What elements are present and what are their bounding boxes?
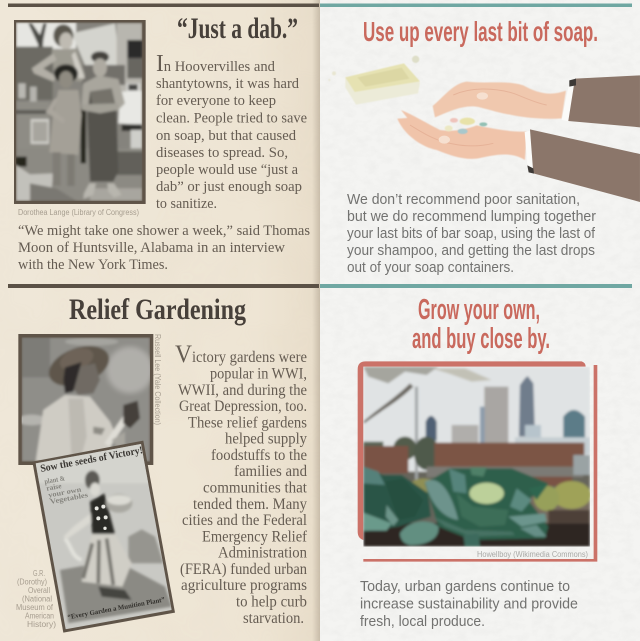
heading: grow your own: Grow your own, bbox=[418, 294, 540, 326]
caption: g.r. overall: Museum of bbox=[16, 603, 54, 612]
body text: urban gardens: Today, urban gardens continue to bbox=[360, 578, 570, 595]
body text: victory gardens: families and bbox=[234, 463, 307, 480]
caption: g.r. overall: Overall bbox=[28, 586, 50, 595]
main cabbage bbox=[425, 468, 548, 540]
body text: victory gardens: tended them. Many bbox=[193, 496, 307, 513]
poster: sow the seeds of victory: raise bbox=[46, 481, 63, 493]
poster: sow the seeds of victory: your own bbox=[47, 485, 82, 499]
boy bbox=[91, 51, 109, 63]
body text: urban gardens bbox=[360, 578, 578, 630]
quote: thomas moon: “We might take one shower a week,” said Thomas bbox=[18, 223, 310, 239]
body text: victory gardens: Administration bbox=[218, 545, 307, 562]
icon: lower hand bbox=[397, 110, 527, 160]
heading: just a dab: “Just a dab.” bbox=[177, 12, 298, 45]
heading: relief gardening: Relief Gardening bbox=[69, 293, 246, 326]
body text: hoovervilles: on soap, but that caused bbox=[156, 128, 296, 144]
body text: victory gardens: cities and the Federal bbox=[182, 512, 307, 529]
girl bbox=[54, 64, 78, 83]
body text: soap advice: your shampoo, and getting the last drops bbox=[347, 242, 595, 259]
body text: victory gardens: helped supply bbox=[225, 431, 307, 448]
body text: victory gardens bbox=[175, 341, 308, 627]
body text: hoovervilles: people would use “just a bbox=[156, 162, 298, 178]
caption: russell lee: Russell Lee (Yale Collection) bbox=[153, 334, 162, 425]
body text: victory gardens: popular in WWI, bbox=[210, 366, 307, 382]
body text: soap advice: your last bits of bar soap, using the last of bbox=[347, 225, 596, 242]
body text: hoovervilles: diseases to spread. So, bbox=[156, 145, 288, 161]
photo: gardener with hat bbox=[17, 334, 153, 465]
panel: relief gardening bbox=[8, 284, 319, 633]
panel: grow your own bbox=[320, 284, 632, 630]
caption: howellboy: Howellboy (Wikimedia Commons) bbox=[477, 550, 588, 559]
body text: victory gardens: WWII, and during the bbox=[178, 382, 307, 399]
icon: lower sleeve bbox=[525, 129, 640, 202]
icon: soap bar bbox=[328, 56, 420, 105]
poster: sow the seeds of victory: plant & bbox=[44, 473, 66, 486]
body text: victory gardens: (FERA) funded urban bbox=[180, 561, 307, 578]
photo credit: Dorothea Lange (Library of Congress) bbox=[18, 208, 139, 217]
panel: use up soap bbox=[320, 4, 640, 276]
frame bbox=[358, 361, 586, 540]
woman behind bbox=[53, 24, 73, 47]
body text: hoovervilles: clean. People tried to save bbox=[156, 110, 307, 126]
body text: soap advice: but we do recommend lumping together bbox=[347, 208, 596, 225]
body text: soap advice: out of your soap containers. bbox=[347, 259, 514, 276]
icon: soap scraps bbox=[445, 118, 487, 134]
icon: finger creases bbox=[410, 89, 547, 146]
body text: hoovervilles: to sanitize. bbox=[156, 196, 217, 212]
caption: g.r. overall: American bbox=[25, 612, 54, 620]
poster: sow the seeds of victory: “Every Garden a Munition Plant” bbox=[67, 596, 166, 621]
poster: sow the seeds of victory: Vegetables bbox=[49, 490, 89, 506]
body text: urban gardens: increase sustainability and provide bbox=[360, 596, 578, 612]
body text: victory gardens: Emergency Relief bbox=[202, 528, 308, 545]
quote: thomas moon: Moon of Huntsville, Alabama in an interview bbox=[18, 240, 285, 256]
body text: soap advice bbox=[347, 191, 596, 276]
panel: just a dab bbox=[8, 4, 319, 273]
caption: g.r. overall: History) bbox=[27, 620, 56, 629]
body text: victory gardens: Victory gardens were bbox=[175, 341, 307, 368]
caption: g.r. overall: (National bbox=[22, 594, 52, 604]
icon: nails bbox=[439, 92, 488, 144]
body text: hoovervilles: In Hoovervilles and bbox=[156, 51, 275, 77]
photo frame and cabbage photo bbox=[358, 361, 597, 562]
body text: hoovervilles bbox=[156, 51, 307, 212]
poster: sow the seeds of victory bbox=[32, 440, 178, 633]
body text: victory gardens: agriculture programs bbox=[181, 577, 307, 594]
caption: g.r. overall bbox=[16, 569, 56, 629]
caption: g.r. overall: G.R. bbox=[33, 569, 45, 578]
body text: victory gardens: communities that bbox=[203, 480, 308, 496]
poster: sow the seeds of victory: Sow the seeds of Victory! bbox=[40, 445, 144, 475]
caption: g.r. overall: (Dorothy) bbox=[17, 578, 47, 586]
body text: victory gardens: Great Depression, too. bbox=[179, 398, 307, 415]
quote: thomas moon: with the New York Times. bbox=[18, 257, 168, 273]
body text: victory gardens: These relief gardens bbox=[188, 414, 307, 431]
left cabbage bbox=[363, 474, 432, 529]
quote: thomas moon bbox=[18, 223, 310, 273]
body text: hoovervilles: dab” or just enough soap bbox=[156, 179, 302, 195]
body text: victory gardens: to help curb bbox=[236, 594, 307, 610]
body text: victory gardens: starvation. bbox=[243, 610, 304, 627]
illustration: soap bar and hands bbox=[328, 56, 640, 202]
icon: upper sleeve bbox=[562, 75, 640, 127]
icon: upper hand bbox=[433, 82, 566, 119]
photo: family at a shantytown bbox=[14, 20, 146, 204]
body text: hoovervilles: for everyone to keep bbox=[156, 93, 276, 109]
photo: cabbage with skyline bbox=[363, 367, 591, 547]
body text: victory gardens: foodstuffs to the bbox=[211, 447, 307, 464]
heading: grow your own bbox=[412, 294, 550, 355]
body text: hoovervilles: shantytowns, it was hard bbox=[156, 76, 299, 92]
body text: soap advice: We don’t recommend poor sanitation, bbox=[347, 191, 580, 208]
body text: urban gardens: fresh, local produce. bbox=[360, 613, 485, 630]
